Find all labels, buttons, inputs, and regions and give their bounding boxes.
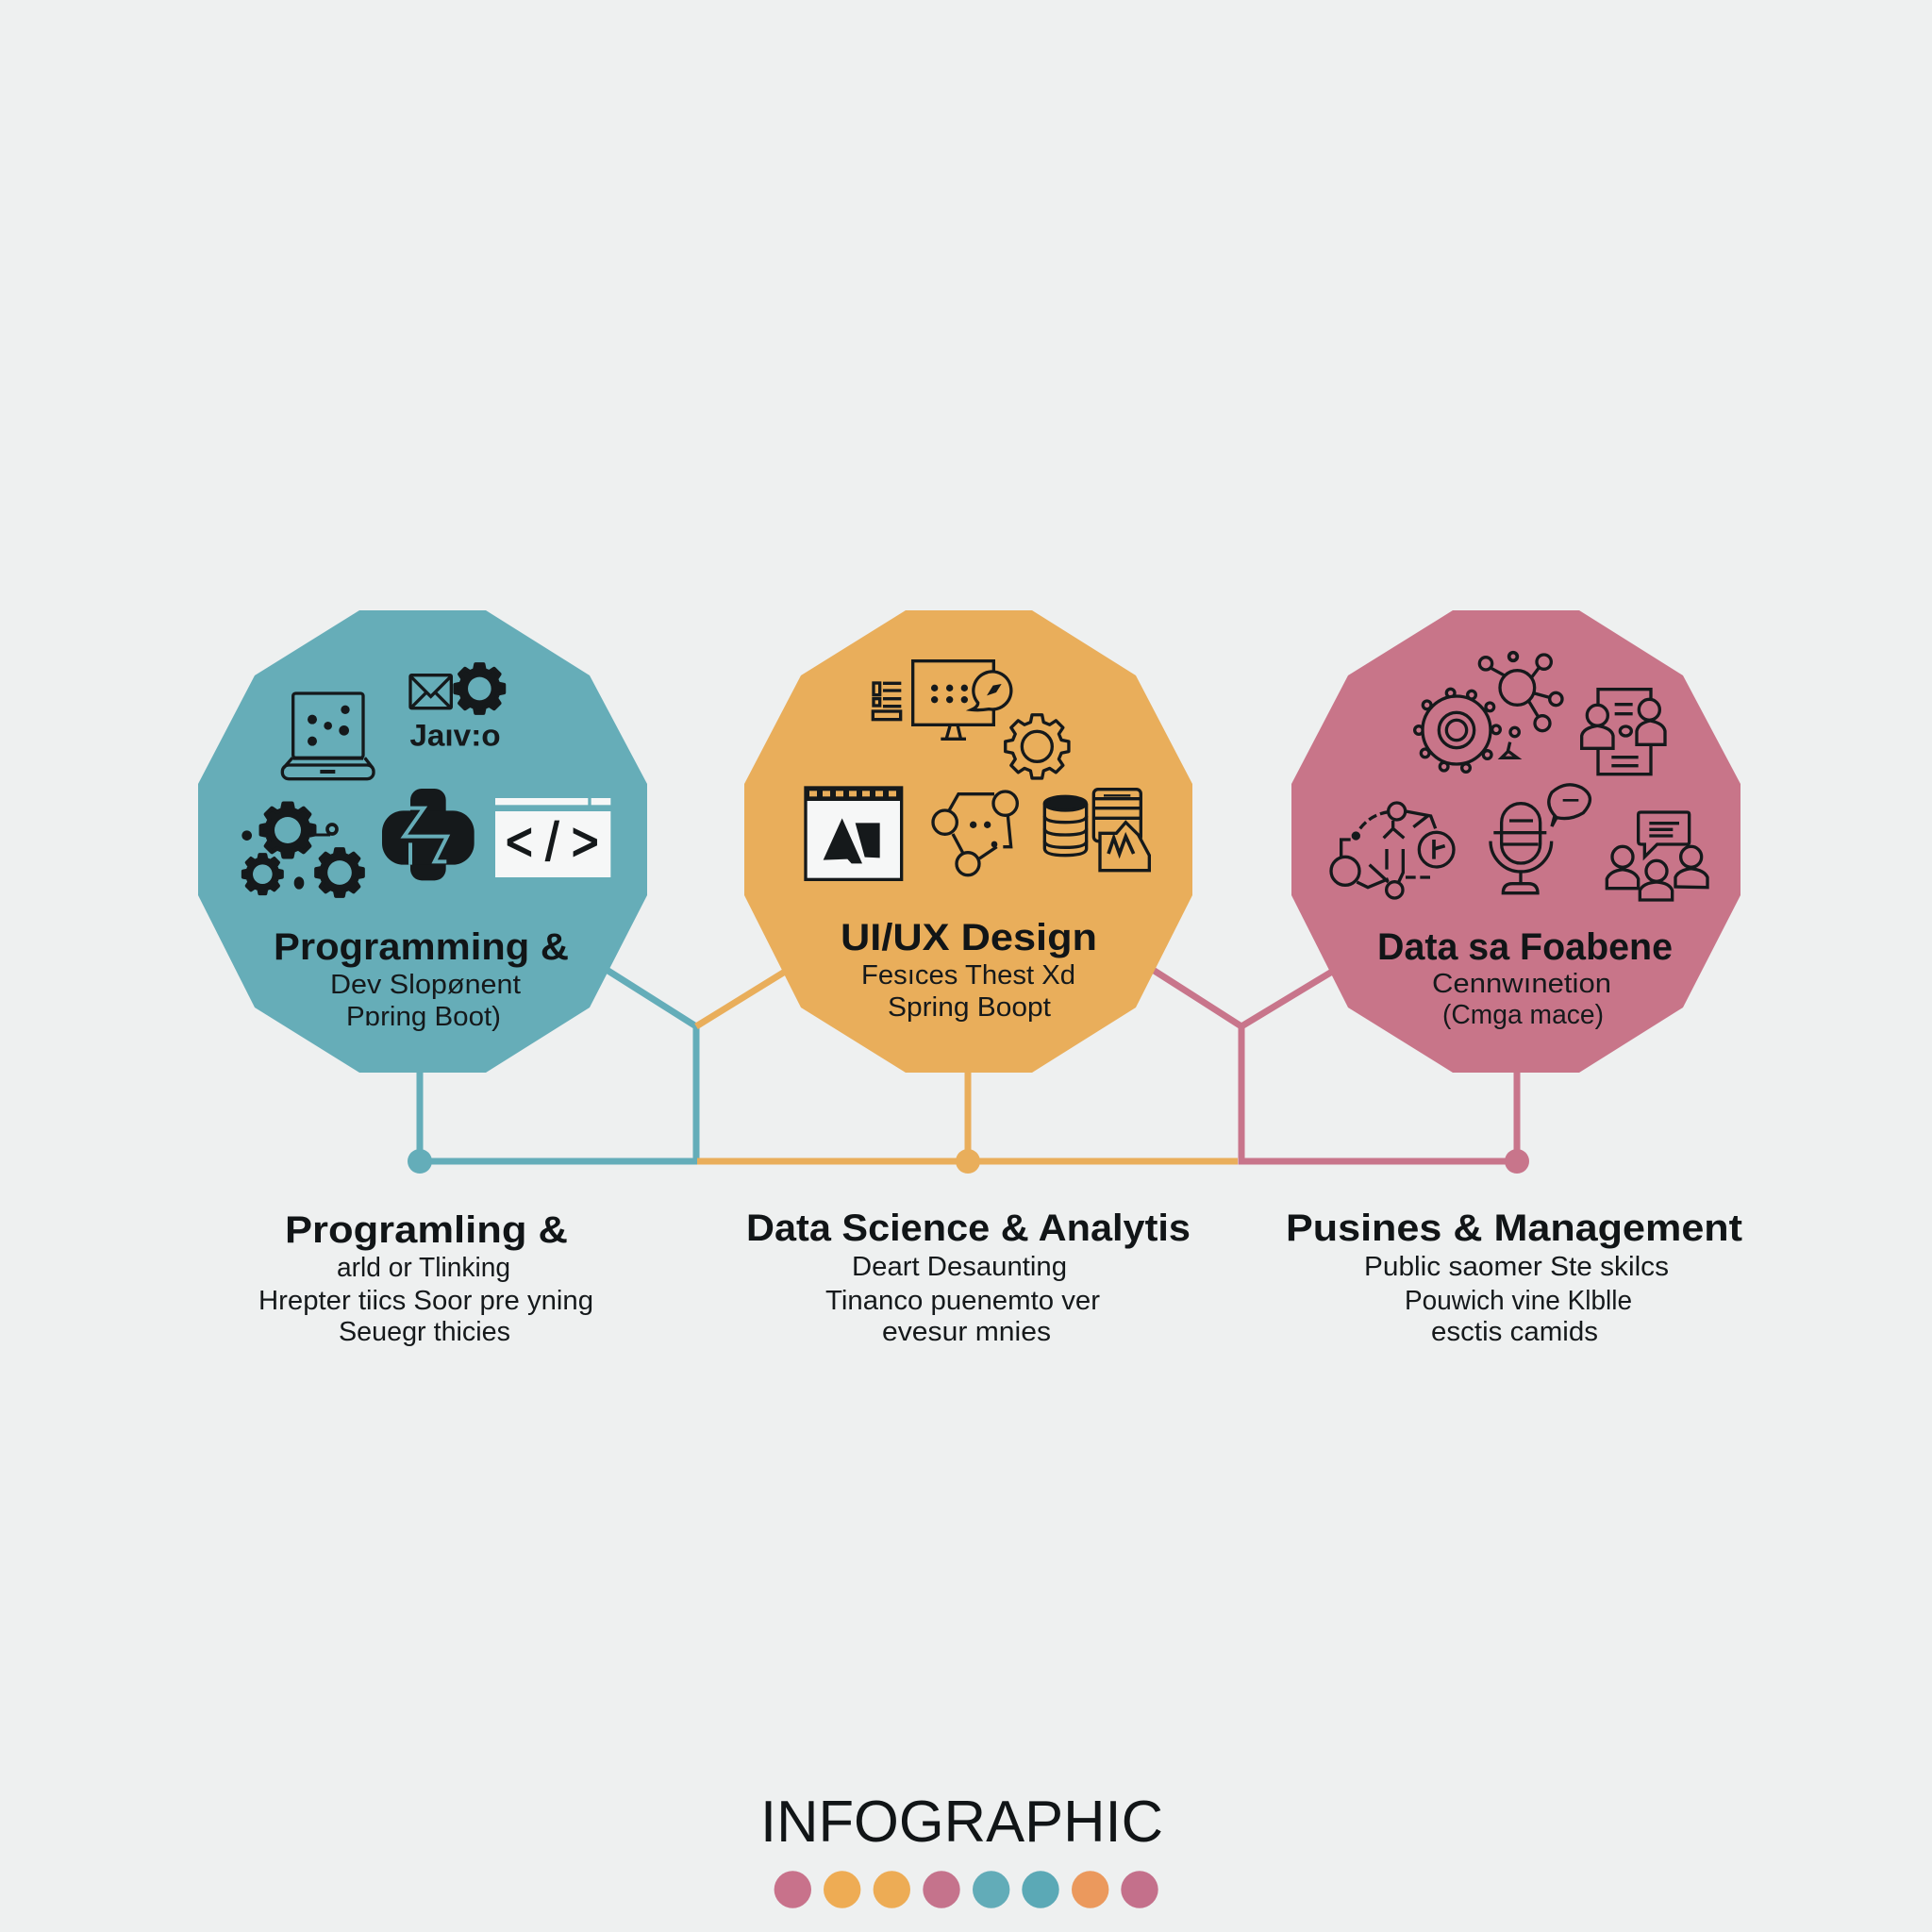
icon: node network [933,791,1017,875]
icon: three people with speech bubble [1607,812,1707,900]
label: Java text: Jaıv:o [409,719,501,753]
icon: python logo [382,789,475,880]
panel: teal programming dodecagon [198,610,647,1073]
teal panel icons [242,664,610,896]
left column line 2: Hrepter tiics Soor pre yning [258,1286,593,1316]
heading: Data sa Foabene: Data sa Foabene [1377,926,1673,968]
icon: monitor with speech bubble [913,661,1011,739]
teal dodecagon shape [198,610,647,1073]
icon: dashed process network [1331,803,1454,898]
icon: bumped gear target [1415,689,1500,772]
icon: document with two people [1582,690,1665,774]
text block: middle column [746,1208,1191,1347]
connector lines: pink [1153,970,1529,1174]
middle column heading: Data Science & Analytis [746,1208,1191,1249]
icon: design app window [806,788,902,879]
icon: gears cluster [242,804,363,896]
left column heading: Programling & [285,1209,568,1251]
icon: hub and nodes [1479,653,1562,758]
middle column line 2: Tinanco puenemto ver [825,1286,1100,1316]
subtext line 1: Cennwınetion [1432,969,1611,999]
panel: pink data dodecagon [1291,610,1740,1073]
text block: right column [1286,1208,1742,1347]
icon: small server [873,683,901,720]
middle column line 1: Deart Desaunting [852,1252,1067,1282]
icon: code window [495,798,610,877]
icon: database with chart card [1093,790,1149,871]
subtext line 2: Pɒring Boot) [346,1002,501,1032]
right column line 1: Public saomer Ste skilcs [1364,1252,1669,1282]
pink dodecagon shape [1291,610,1740,1073]
heading: UI/UX Design: UI/UX Design [841,917,1097,958]
middle column line 3: evesur mnies [882,1317,1051,1347]
icon: envelope [410,675,451,708]
icon: gear top [455,664,504,713]
right column heading: Pusines & Management [1286,1208,1742,1249]
right column line 2: Pouwich vine Klblle [1405,1286,1632,1316]
subtext line 2: (Cmga mace) [1442,1000,1604,1030]
heading: Programming &: Programming & [274,926,569,968]
icon: laptop [282,693,374,779]
text block: left column [258,1209,593,1347]
connector lines: teal [408,970,696,1174]
subtext line 1: Dev Slopønent [330,970,521,1000]
orange panel icons [806,661,1149,879]
left column line 1: arld or Tlinking [337,1253,510,1283]
subtext line 2: Spring Boopt [888,992,1051,1023]
icon: gear outline [1006,715,1069,778]
panel: orange UI/UX dodecagon [744,610,1192,1073]
subtext line 1: Fesıces Thest Xd [861,960,1075,991]
left column line 3: Seuegr thicies [339,1317,510,1347]
right column line 3: esctis camids [1431,1317,1598,1347]
icon: microphone with speech bubble [1491,785,1590,893]
connector lines: orange [696,972,1238,1174]
icon: database stack [1044,796,1087,856]
icon: code window: < / > [506,813,599,873]
colour dots row [774,1871,1158,1908]
orange dodecagon shape [744,610,1192,1073]
title: INFOGRAPHIC [760,1790,1163,1855]
pink panel icons [1331,653,1707,900]
